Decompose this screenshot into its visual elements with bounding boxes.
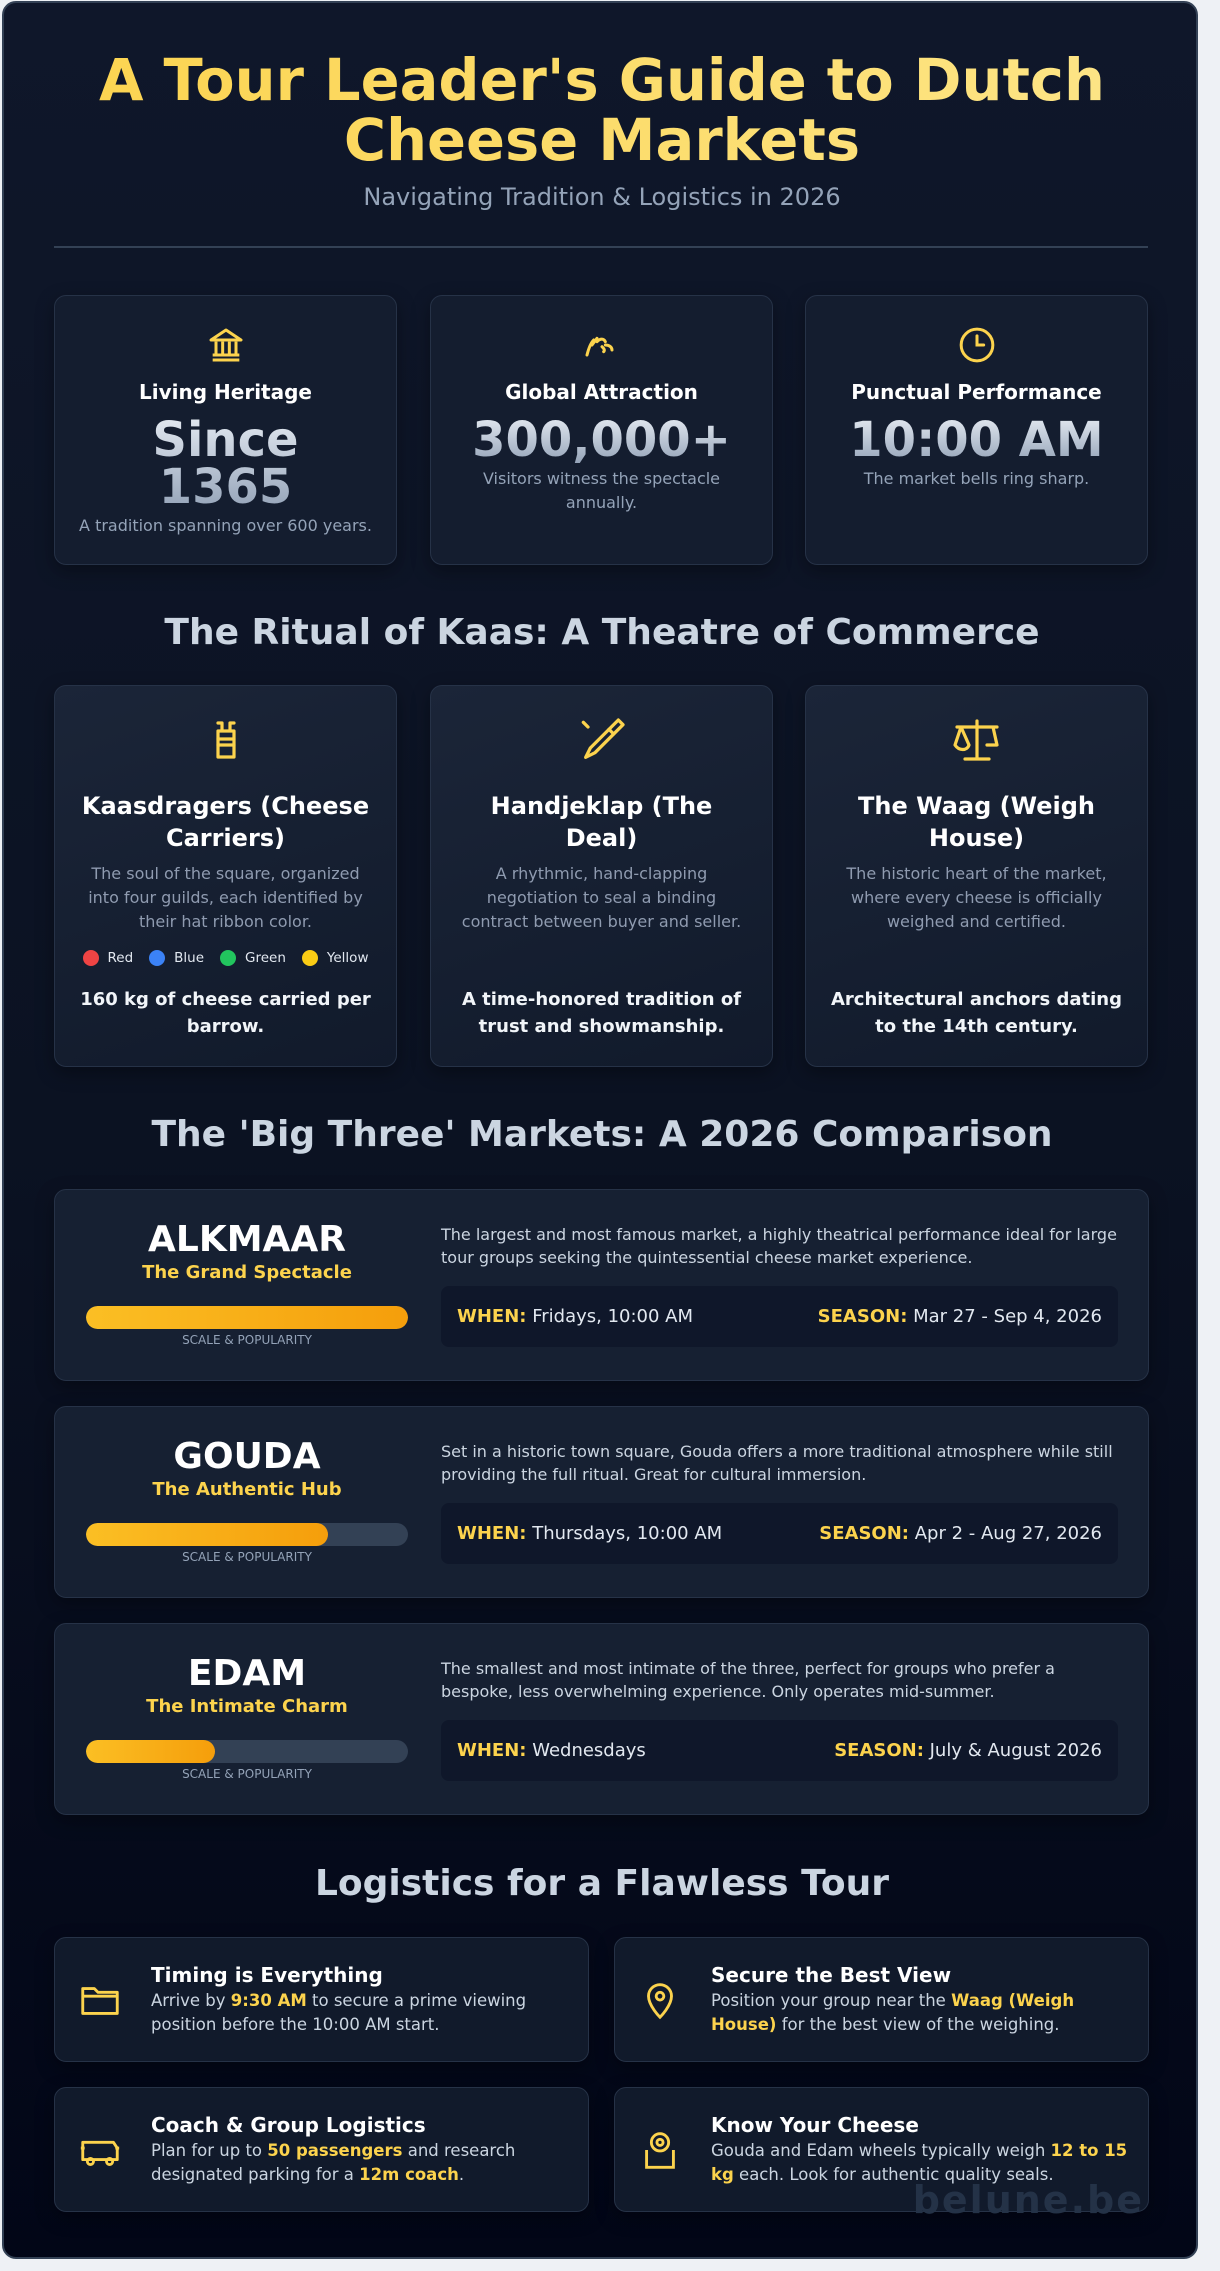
title <box>4 51 1200 171</box>
stat card: living heritage: A tradition spanning over 600 years. <box>79 516 372 535</box>
ritual card: handjeklap: Handjeklap (The <box>491 792 712 820</box>
market card: edam: WHEN: Wednesdays <box>457 1740 646 1761</box>
stat card: global attraction <box>430 295 773 565</box>
legend: guild colors: Yellow <box>327 950 368 966</box>
market card: edam: The smallest and most intimate of the three, perfect for groups who prefer a bespoke, less overwhelming experience. Only operates mid-summer. <box>441 1659 1055 1701</box>
market card: alkmaar: SCALE & POPULARITY <box>182 1333 312 1347</box>
market card: edam: EDAM <box>188 1653 306 1694</box>
market card: gouda <box>54 1406 1149 1598</box>
market card: alkmaar: SEASON: Mar 27 - Sep 4, 2026 <box>818 1306 1102 1327</box>
icon: scales <box>953 719 999 761</box>
title: Cheese Markets <box>344 107 860 174</box>
market card: edam <box>54 1623 1149 1815</box>
market card: edam: SCALE & POPULARITY <box>182 1767 312 1781</box>
icon: seal <box>645 2132 675 2169</box>
stat card: punctual performance <box>805 295 1148 565</box>
heading: ritual: The Ritual of Kaas: A Theatre of Commerce <box>164 612 1040 653</box>
stat card: punctual performance: The market bells ring sharp. <box>864 469 1089 488</box>
logistics card: coach: Coach & Group Logistics <box>151 2113 426 2137</box>
market card: gouda: WHEN: Thursdays, 10:00 AM <box>457 1523 722 1544</box>
market card: gouda: SEASON: Apr 2 - Aug 27, 2026 <box>819 1523 1102 1544</box>
logistics card: timing: Arrive by 9:30 AM to secure a prime viewing position before the 10:00 AM start. <box>151 1991 526 2034</box>
market card: alkmaar: The Grand Spectacle <box>142 1262 352 1283</box>
icon: bus <box>80 2140 120 2166</box>
stat card: living heritage: Living Heritage <box>139 380 312 404</box>
icon: clock <box>960 328 994 362</box>
bar: popularity <box>86 1523 408 1546</box>
logistics card: cheese <box>614 2087 1149 2212</box>
ritual card: handjeklap: Deal) <box>566 824 637 852</box>
logistics card: coach <box>54 2087 589 2212</box>
icon: folder <box>81 1987 119 2015</box>
stat card: global attraction: Global Attraction <box>505 380 698 404</box>
market card: gouda: The Authentic Hub <box>152 1479 342 1500</box>
heading: big three: The 'Big Three' Markets: A 2026 Comparison <box>151 1114 1053 1155</box>
market card: alkmaar: ALKMAAR <box>148 1219 346 1260</box>
ritual card: waag: The historic heart of the market, where every cheese is officially weighed and certified. <box>846 864 1107 931</box>
ritual card: kaasdragers: Kaasdragers (Cheese Carriers) <box>82 792 369 852</box>
stat card: punctual performance: Punctual Performance <box>851 380 1102 404</box>
market card: alkmaar: WHEN: Fridays, 10:00 AM <box>457 1306 693 1327</box>
icon: carrier <box>216 721 236 759</box>
logistics card: coach: Plan for up to 50 passengers and research designated parking for a 12m coach. <box>151 2141 515 2184</box>
ritual card: handjeklap: A time-honored tradition of trust and showmanship. <box>462 989 741 1037</box>
market card: gouda: SCALE & POPULARITY <box>182 1550 312 1564</box>
icon: pen <box>582 718 625 759</box>
ritual card: waag: The Waag (Weigh House) <box>858 792 1095 852</box>
stat card: global attraction: Visitors witness the spectacle annually. <box>483 469 720 512</box>
market card: edam: The Intimate Charm <box>146 1696 348 1717</box>
icon: hands <box>586 336 614 356</box>
ritual card: kaasdragers: 160 kg of cheese carried per barrow. <box>80 989 371 1037</box>
stat card: living heritage: 1365 <box>159 459 292 515</box>
legend: guild colors: Red <box>108 950 133 966</box>
heading: logistics: Logistics for a Flawless Tour <box>315 1863 889 1904</box>
ritual card: handjeklap: A rhythmic, hand-clapping negotiation to seal a binding contract between buyer and seller. <box>462 864 741 931</box>
legend: guild colors <box>83 950 368 966</box>
logistics card: timing <box>54 1937 589 2062</box>
logistics card: timing: Timing is Everything <box>151 1963 383 1987</box>
stat card: living heritage <box>54 295 397 565</box>
watermark: belune.be <box>913 2178 1144 2222</box>
market card: gouda: Set in a historic town square, Gouda offers a more traditional atmosphere while still providing the full ritual. Great for cultural immersion. <box>441 1442 1113 1484</box>
logistics card: cheese: Know Your Cheese <box>711 2113 919 2137</box>
legend: guild colors: Blue <box>174 950 204 966</box>
legend: guild colors: Green <box>245 950 286 966</box>
logistics card: view: Secure the Best View <box>711 1963 951 1987</box>
stat card: punctual performance: 10:00 AM <box>849 412 1104 468</box>
ritual card: kaasdragers: The soul of the square, organized into four guilds, each identified by their hat ribbon color. <box>88 864 363 931</box>
bar: popularity <box>86 1740 408 1763</box>
bar: popularity <box>86 1306 408 1329</box>
market card: alkmaar <box>54 1189 1149 1381</box>
ritual card: waag: Architectural anchors dating to the 14th century. <box>831 989 1122 1037</box>
logistics card: cheese: Gouda and Edam wheels typically weigh 12 to 15 kg each. Look for authentic quality seals. <box>711 2141 1127 2184</box>
ritual card: kaasdragers <box>54 685 397 1067</box>
ritual card: waag <box>805 685 1148 1067</box>
subtitle: Navigating Tradition & Logistics in 2026 <box>363 183 841 211</box>
logistics card: view <box>614 1937 1149 2062</box>
icon: landmark <box>210 328 243 362</box>
market card: gouda: GOUDA <box>173 1436 321 1477</box>
stat card: living heritage: Since <box>152 412 299 468</box>
title: A Tour Leader's Guide to Dutch <box>99 47 1105 114</box>
icon: map pin <box>647 1983 673 2020</box>
logistics card: view: Position your group near the Waag (Weigh House) for the best view of the weighing. <box>711 1991 1074 2034</box>
ritual card: handjeklap <box>430 685 773 1067</box>
market card: edam: SEASON: July & August 2026 <box>834 1740 1102 1761</box>
market card: alkmaar: The largest and most famous market, a highly theatrical performance ideal for large tour groups seeking the quintessential cheese market experience. <box>441 1225 1117 1267</box>
stat card: global attraction: 300,000+ <box>472 412 731 468</box>
